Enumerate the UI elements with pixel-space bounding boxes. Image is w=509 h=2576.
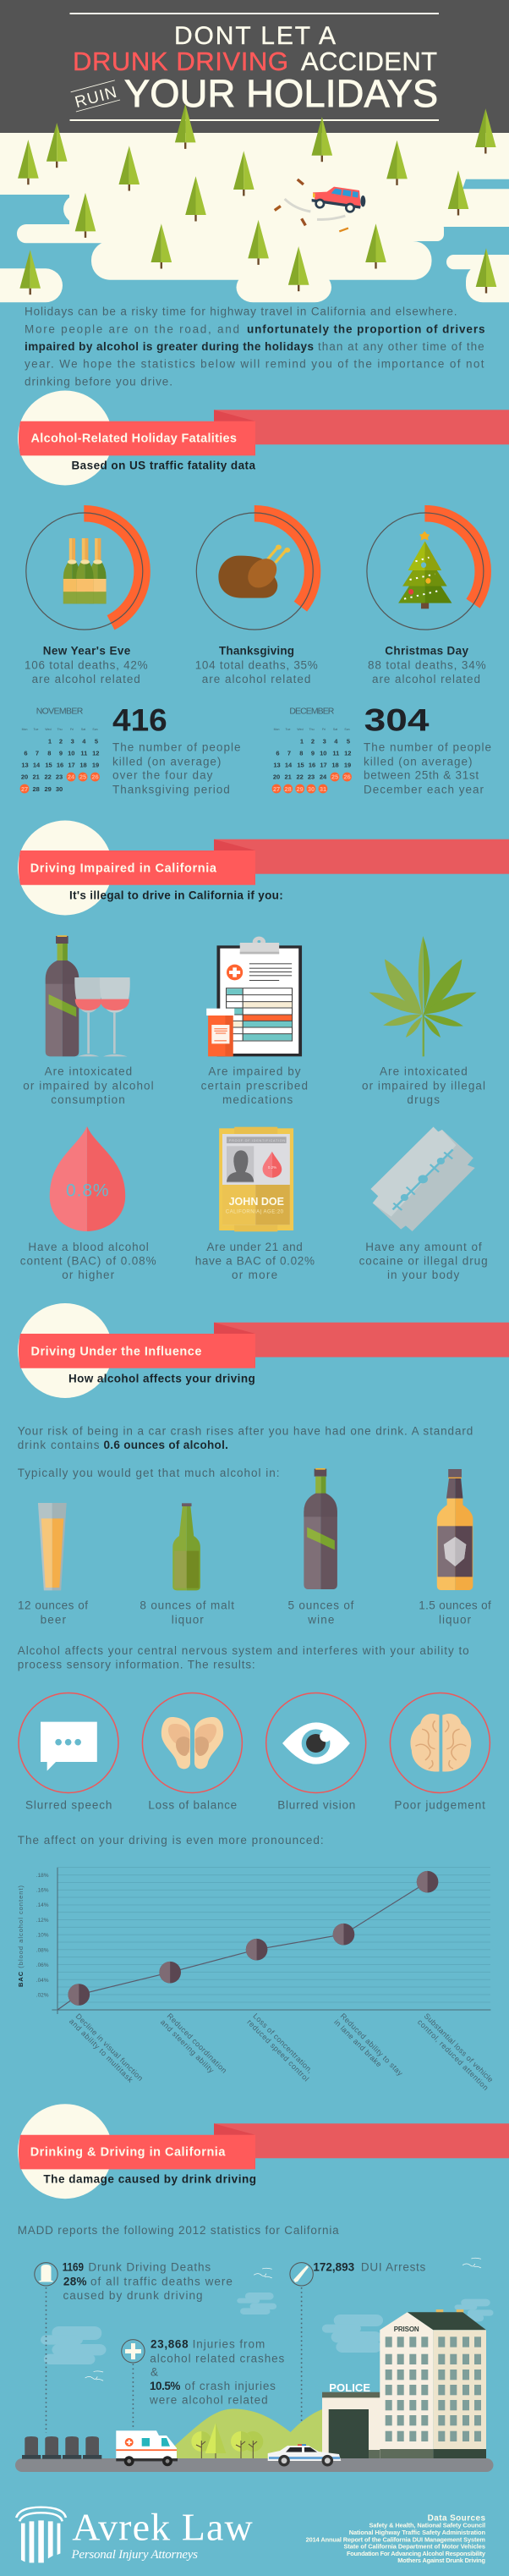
intro paragraph: More people are on the road, and — [25, 322, 239, 335]
trees — [18, 104, 496, 294]
text: under 21: or more — [232, 1269, 277, 1281]
text: illegal drugs: Are intoxicated — [380, 1065, 468, 1078]
stat: 304: 304 — [364, 702, 430, 737]
calendar: December: 18 — [331, 762, 339, 769]
calendar: December: 9 — [311, 750, 315, 757]
data sources: Foundation For Advancing Alcohol Responsibility — [347, 2550, 486, 2557]
data sources — [306, 2513, 486, 2564]
section heading: Driving Impaired in California: Driving Impaired in California — [30, 862, 217, 876]
section heading: Alcohol-Related Holiday Fatalities: Alcohol-Related Holiday Fatalities — [30, 432, 237, 446]
line chart: BAC vs driving effects — [17, 1868, 495, 2092]
calendar: November: 11 — [80, 750, 87, 757]
calendar: November: Mon — [22, 728, 27, 731]
text: prescribed medications: Are impaired by — [208, 1065, 301, 1078]
line chart: BAC vs driving effects: .06% — [36, 1962, 49, 1968]
stat: DUI arrests: 172,893 — [313, 2261, 355, 2274]
calendar: November: 1 — [48, 738, 52, 746]
calendar: November: 18 — [79, 762, 87, 769]
icon: Christmas tree — [398, 531, 452, 608]
logo: Avrek Law: Avrek Law — [72, 2506, 253, 2549]
calendar: December: 30 — [308, 785, 315, 793]
text: drink sizes: 5 ounces of — [287, 1599, 354, 1612]
data sources: Mothers Against Drunk Driving — [397, 2557, 485, 2564]
line chart: BAC vs driving effects: Substantial loss of vehicle — [423, 2012, 495, 2084]
calendar: November: 16 — [57, 762, 63, 769]
icon: prison building: PRISON — [394, 2326, 419, 2333]
text: symptom labels: Blurred vision — [277, 1798, 355, 1811]
icon: police station — [322, 2381, 381, 2458]
line chart: BAC vs driving effects: .04% — [36, 1978, 49, 1984]
calendar: November: 23 — [56, 773, 63, 781]
text: illegal drugs: drugs — [407, 1093, 440, 1106]
green hills and park trees — [161, 2408, 322, 2458]
calendar: December: 23 — [308, 773, 315, 781]
stat: drunk driving deaths: 28% — [63, 2275, 86, 2287]
icon: razor blade — [370, 1127, 475, 1231]
stat: injuries: 23,868 — [151, 2338, 189, 2351]
text: BAC over limit: Have a blood alcohol — [28, 1241, 149, 1253]
stat: 304 — [364, 702, 491, 795]
icon: ID card: PROOF OF IDENTIFICATION — [229, 1139, 285, 1142]
calendar: December: 1 — [300, 738, 304, 746]
calendar: December: 31 — [320, 785, 326, 793]
text: BAC over limit: or higher — [62, 1269, 115, 1281]
calendar: December: 28 — [285, 785, 292, 793]
line chart: BAC vs driving effects: control, reduced attention — [416, 2017, 490, 2092]
calendar: November: 19 — [92, 762, 99, 769]
calendar: December: 12 — [344, 750, 351, 757]
logo: Avrek Law: Personal Injury Attorneys — [71, 2548, 198, 2562]
calendar: November: 21 — [33, 773, 40, 781]
icon: malt liquor bottle — [172, 1503, 200, 1590]
icon: ID card: 0.2% — [268, 1165, 276, 1170]
text: Thanksgiving: Thanksgiving — [219, 644, 294, 657]
section heading: Drinking & Driving in California: Drinking & Driving in California — [30, 2146, 226, 2160]
icon: wine bottle and glasses — [46, 935, 130, 1056]
calendar: December: DECEMBER — [289, 706, 335, 716]
calendar: December: 20 — [273, 773, 280, 781]
line chart: BAC vs driving effects: BAC (blood alcohol content) — [17, 1885, 25, 1987]
text: Christmas Day: Christmas Day — [385, 644, 468, 657]
stat: drunk driving deaths: 1169 — [63, 2261, 84, 2274]
line chart: BAC vs driving effects: and steering ability — [159, 2017, 216, 2075]
calendar: November — [20, 706, 100, 793]
calendar: November: Thu — [57, 728, 63, 731]
calendar: November: 25 — [79, 773, 86, 781]
line chart: BAC vs driving effects: .08% — [36, 1948, 49, 1953]
calendar: November: 20 — [21, 773, 28, 781]
icon: brain — [390, 1693, 490, 1792]
calendar: December: 2 — [311, 738, 315, 746]
text: Thanksgiving — [195, 644, 318, 685]
stat: 304: December each year — [364, 783, 484, 795]
text: chart intro: The affect on your driving is even more pronounced: — [18, 1834, 324, 1847]
text: drink sizes: wine — [307, 1613, 334, 1626]
stat: 304: killed (on average) — [364, 755, 472, 768]
title: RUIN — [74, 84, 118, 112]
text: standard drink: 0.6 ounces of alcohol. — [103, 1439, 228, 1451]
icon: prison building — [380, 2309, 486, 2458]
calendar: December: 4 — [334, 738, 338, 746]
section heading: Driving Impaired in California — [18, 821, 509, 916]
stat: 416: Thanksgiving period — [112, 783, 230, 795]
calendar: December: 26 — [343, 773, 351, 781]
text: drink sizes — [18, 1599, 491, 1626]
calendar: November: 2 — [59, 738, 63, 746]
calendar: November: 6 — [24, 750, 28, 757]
text: New Year's Eve: 106 total deaths, 42% — [25, 659, 148, 672]
title: ACCIDENT — [301, 47, 437, 76]
text: New Year's Eve — [25, 644, 148, 685]
text: cocaine or illegal drug — [359, 1241, 488, 1281]
icon: whiskey bottle — [437, 1469, 473, 1590]
text: New Year's Eve: New Year's Eve — [43, 644, 131, 657]
icon: turkey — [218, 545, 290, 598]
donut chart: Christmas Day 34% — [367, 513, 484, 630]
calendar: November: Fri — [70, 728, 74, 731]
section heading: Driving Under the Influence: Driving Under the Influence — [30, 1345, 201, 1358]
calendar: November: NOVEMBER — [36, 706, 84, 716]
calendar: November: 12 — [92, 750, 99, 757]
icon: ambulance — [116, 2430, 178, 2466]
line chart: BAC vs driving effects: Reduced coordination — [166, 2012, 228, 2075]
road — [15, 2458, 494, 2472]
icon: cannabis leaf — [369, 936, 477, 1056]
stat: drunk driving deaths: Drunk Driving Deaths — [88, 2261, 211, 2274]
data sources: 2014 Annual Report of the California DUI Management System — [306, 2535, 485, 2543]
intro paragraph — [25, 305, 485, 388]
calendar: December: 10 — [320, 750, 326, 757]
text: drink sizes: beer — [41, 1613, 66, 1626]
calendar: November: 22 — [45, 773, 52, 781]
calendar: December: 22 — [297, 773, 304, 781]
calendar: November: 8 — [47, 750, 51, 757]
title: YOUR HOLIDAYS — [124, 72, 438, 115]
calendar: November: 26 — [91, 773, 99, 781]
text: cocaine or illegal drug: cocaine or illegal drug — [359, 1254, 488, 1267]
calendar: December: Wed — [297, 728, 304, 731]
line chart: BAC vs driving effects: .12% — [36, 1918, 49, 1924]
section heading: Drinking & Driving in California: The damage caused by drink driving — [43, 2173, 256, 2186]
calendar: November: 5 — [95, 738, 98, 746]
text: under 21: Are under 21 and — [206, 1241, 303, 1253]
text: illegal drugs: or impaired by illegal — [362, 1079, 485, 1092]
calendar: November: 15 — [45, 762, 52, 769]
stat: 416: The number of people — [112, 740, 240, 753]
stat: 416: over the four day — [112, 769, 213, 782]
data sources: National Highway Traffic Safety Administration — [349, 2529, 485, 2536]
line chart: BAC vs driving effects: and ability to multitask — [68, 2017, 135, 2084]
section heading: Drinking & Driving in California — [18, 2104, 509, 2199]
stat: injuries: alcohol related crashes — [150, 2352, 285, 2364]
icon: blood alcohol drop: 0.8% — [66, 1181, 109, 1200]
calendar: November: 29 — [45, 785, 52, 793]
calendar: November: 27 — [21, 785, 28, 793]
calendar: November: 24 — [68, 773, 75, 781]
text: drink sizes: liquor — [439, 1613, 472, 1626]
stat: injuries: of crash injuries — [184, 2380, 276, 2392]
text: under 21: have a BAC of 0.02% — [195, 1254, 315, 1267]
line chart: BAC vs driving effects: .16% — [36, 1887, 49, 1894]
crashed car with bottles — [274, 179, 365, 233]
calendar: December: 3 — [323, 738, 326, 746]
text: standard drink: Your risk of being in a car crash rises after you have had one drink. A standard — [18, 1424, 473, 1437]
calendar: December: 25 — [331, 773, 338, 781]
calendar: November: Tue — [34, 728, 39, 731]
text: symptom labels: Poor judgement — [394, 1798, 485, 1811]
calendar: December: 13 — [273, 762, 281, 769]
icon: ears — [142, 1693, 242, 1792]
calendar: December: 8 — [299, 750, 303, 757]
stat: injuries: Injuries from — [193, 2338, 265, 2351]
text: standard drink — [18, 1424, 473, 1479]
intro paragraph: year. We hope the statistics below will remind you of the importance of not — [25, 358, 484, 371]
header banner — [0, 0, 509, 134]
calendar: November: 17 — [68, 762, 75, 769]
calendar: December: 24 — [320, 773, 327, 781]
stat: 416: killed (on average) — [112, 755, 221, 768]
calendar: December: 21 — [285, 773, 292, 781]
calendar: November: 9 — [59, 750, 63, 757]
text: Christmas Day — [368, 644, 486, 685]
section heading: Alcohol-Related Holiday Fatalities — [18, 391, 509, 486]
calendar: December — [272, 706, 352, 793]
calendar: December: 14 — [285, 762, 293, 769]
line chart: BAC vs driving effects: .18% — [36, 1873, 49, 1879]
text: cocaine or illegal drug: Have any amount of — [365, 1241, 482, 1253]
text: prescribed medications: medications — [222, 1093, 293, 1106]
calendar: December: 5 — [347, 738, 350, 746]
line chart: BAC vs driving effects: Reduced ability to stay — [339, 2012, 405, 2078]
stat: drunk driving deaths: caused by drunk driving — [63, 2289, 203, 2302]
title: DRUNK DRIVING — [73, 47, 288, 76]
calendar: November: 4 — [82, 738, 86, 746]
intro paragraph: Holidays can be a risky time for highway travel in California and elsewhere. — [25, 305, 457, 318]
icon: speech bubble — [19, 1693, 118, 1792]
calendar: November: 28 — [33, 785, 40, 793]
text: BAC over limit: content (BAC) of 0.08% — [20, 1254, 156, 1267]
icon: tombstones — [22, 2436, 101, 2459]
calendar: December: Thu — [309, 728, 315, 731]
text: alcohol impairment: Are intoxicated — [45, 1065, 132, 1078]
stat: 416: 416 — [112, 702, 167, 737]
icon: police car — [268, 2444, 341, 2466]
calendar: December: 7 — [287, 750, 291, 757]
calendar: November: Sat — [81, 728, 85, 731]
stat: 304: between 25th & 31st — [364, 769, 479, 782]
text: illegal drugs — [362, 1065, 485, 1106]
section heading: Driving Under the Influence: How alcohol affects your driving — [68, 1372, 255, 1384]
text: Christmas Day: are alcohol related — [372, 673, 480, 685]
icon: blood alcohol drop — [50, 1126, 125, 1231]
calendar: November: 3 — [71, 738, 74, 746]
calendar: December: Mon — [274, 728, 279, 731]
text: Thanksgiving: 104 total deaths, 35% — [195, 659, 318, 672]
text: symptom labels: Slurred speech — [25, 1798, 112, 1811]
calendar: November: Sun — [92, 728, 98, 731]
calendar: December: Sun — [344, 728, 350, 731]
donut chart: Thanksgiving 35% — [196, 513, 313, 630]
icon: ID card: JOHN DOE — [229, 1196, 284, 1208]
intro paragraph: unfortunately the proportion of drivers — [247, 322, 485, 335]
text: drink sizes: 1.5 ounces of — [419, 1599, 491, 1612]
stat: injuries: & — [151, 2365, 158, 2378]
donut chart: New Year's Eve 42% — [26, 513, 143, 630]
text: alcohol impairment — [23, 1065, 154, 1106]
data sources: State of California Department of Motor Vehicles — [343, 2543, 485, 2551]
text: symptom labels: Loss of balance — [148, 1798, 237, 1811]
data sources: Data Sources — [428, 2513, 485, 2523]
calendar: December: Fri — [322, 728, 326, 731]
calendar: December: 11 — [332, 750, 339, 757]
line chart: BAC vs driving effects: Decline in visual function — [74, 2012, 145, 2083]
text: nervous system: process sensory information. The results: — [18, 1658, 255, 1671]
calendar: December: 19 — [344, 762, 351, 769]
calendar: November: 13 — [21, 762, 29, 769]
text: cocaine or illegal drug: in your body — [387, 1269, 459, 1281]
icon: eye — [266, 1693, 366, 1792]
text: drink sizes: liquor — [172, 1613, 204, 1626]
text: Christmas Day: 88 total deaths, 34% — [368, 659, 486, 672]
text: drink sizes: 8 ounces of malt — [140, 1599, 234, 1612]
section heading: Alcohol-Related Holiday Fatalities: Based on US traffic fatality data — [71, 459, 255, 471]
text: nervous system: Alcohol affects your central nervous system and interferes with your ability to — [18, 1644, 469, 1657]
text: drink sizes: 12 ounces of — [18, 1599, 88, 1612]
icon: clipboard and prescription bottle — [206, 937, 302, 1056]
calendar: November: 14 — [33, 762, 41, 769]
stat: drunk driving deaths: of all traffic deaths were — [90, 2275, 233, 2287]
calendar: December: 16 — [309, 762, 315, 769]
text: symptom labels — [25, 1798, 485, 1811]
stat: injuries: were alcohol related — [149, 2393, 268, 2406]
snowy cream landscape — [0, 133, 509, 302]
stat: injuries — [122, 2338, 285, 2429]
stat: DUI arrests: DUI Arrests — [361, 2261, 426, 2274]
line chart: BAC vs driving effects: in lane and brake — [332, 2017, 383, 2068]
calendar: November: 30 — [56, 785, 63, 793]
icon: beer glass — [38, 1503, 67, 1590]
calendar: December: 15 — [297, 762, 304, 769]
text: standard drink: drink contains — [18, 1439, 100, 1451]
calendar: December: 27 — [273, 785, 280, 793]
line chart: BAC vs driving effects: .14% — [36, 1902, 49, 1908]
text: under 21 — [195, 1241, 315, 1281]
icon: wine bottle — [304, 1468, 337, 1589]
calendar: November: Wed — [45, 728, 52, 731]
text: nervous system — [18, 1644, 469, 1671]
intro paragraph: impaired by alcohol is greater during the holidays — [25, 340, 314, 353]
section heading: Driving Impaired in California: It's illegal to drive in California if you: — [69, 889, 283, 901]
text: alcohol impairment: consumption — [51, 1093, 125, 1106]
section heading: Driving Under the Influence — [18, 1303, 509, 1398]
text: Thanksgiving: are alcohol related — [202, 673, 310, 685]
icon: ID card: CALIFORNIA| AGE:20 — [226, 1209, 284, 1214]
background clouds and birds — [41, 2258, 494, 2381]
text: New Year's Eve: are alcohol related — [32, 673, 140, 685]
calendar: December: Sat — [333, 728, 337, 731]
line chart: BAC vs driving effects: .02% — [36, 1992, 49, 1999]
stat: DUI arrests — [290, 2261, 426, 2444]
intro paragraph: drinking before you drive. — [25, 375, 172, 388]
title — [71, 22, 438, 115]
stat: injuries: 10.5% — [150, 2380, 180, 2392]
icon: police station: POLICE — [329, 2381, 370, 2394]
data sources: Safety & Health, National Safety Council — [369, 2522, 485, 2529]
stat: drunk driving deaths — [35, 2261, 233, 2433]
calendar: December: 17 — [320, 762, 327, 769]
line chart: BAC vs driving effects: Loss of concentration, — [251, 2012, 315, 2075]
icon: ID card — [219, 1127, 293, 1231]
calendar: December: 6 — [276, 750, 280, 757]
line chart: BAC vs driving effects: .10% — [36, 1933, 49, 1939]
text: prescribed medications — [201, 1065, 308, 1106]
line chart: BAC vs driving effects: reduced speed control — [245, 2017, 310, 2083]
calendar: November: 10 — [68, 750, 74, 757]
icon: champagne bottles — [63, 538, 107, 603]
text: standard drink: Typically you would get that much alcohol in: — [18, 1467, 279, 1479]
stat: 304: The number of people — [364, 740, 491, 753]
stat: 416 — [112, 702, 240, 795]
title: DONT LET A — [174, 22, 336, 50]
text: MADD intro: MADD reports the following 2012 statistics for California — [18, 2224, 339, 2237]
calendar: November: 7 — [36, 750, 39, 757]
text: BAC over limit — [20, 1241, 156, 1281]
calendar: December: 29 — [297, 785, 304, 793]
calendar: December: Tue — [286, 728, 291, 731]
logo: Avrek Law — [16, 2506, 253, 2562]
text: alcohol impairment: or impaired by alcohol — [23, 1079, 154, 1092]
intro paragraph: than at any other time of the — [318, 340, 484, 353]
text: prescribed medications: certain prescribed — [201, 1079, 308, 1092]
